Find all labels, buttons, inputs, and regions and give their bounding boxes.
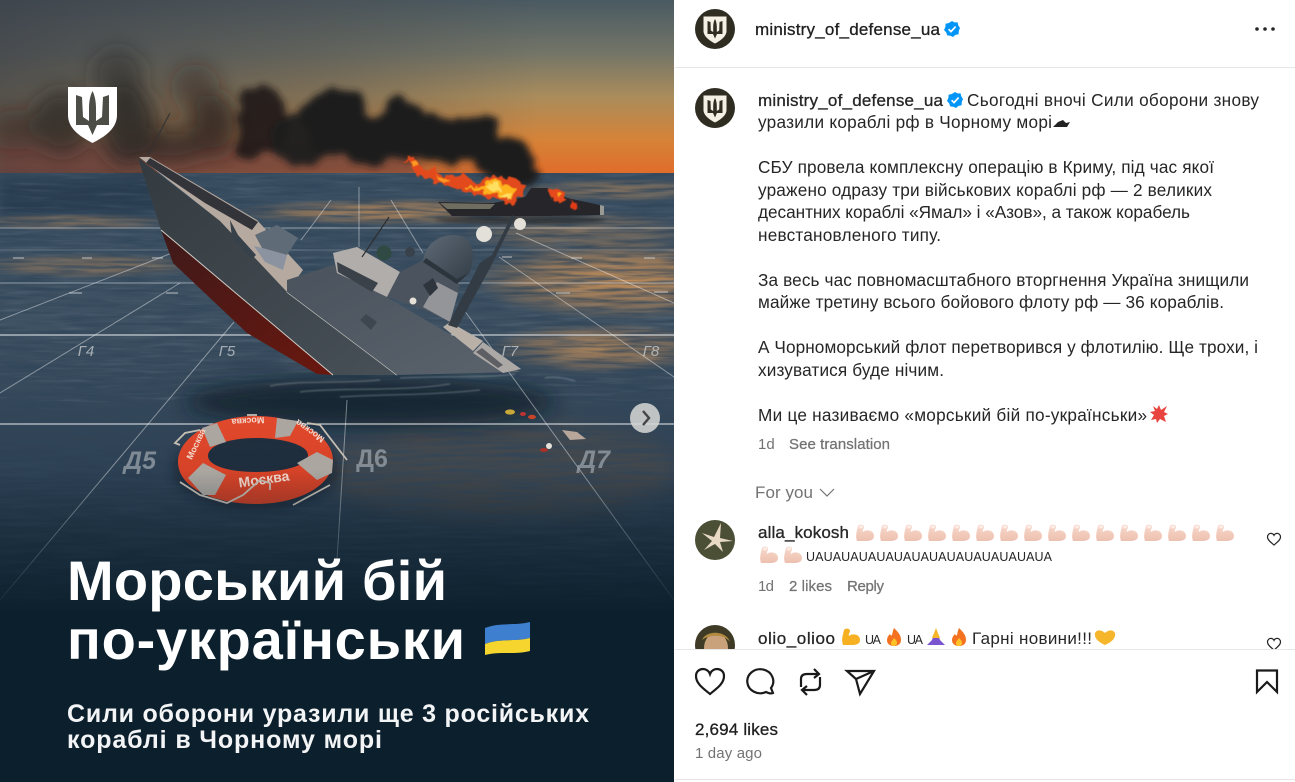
comment: alla_kokosh: UAUAUAUAUAUAUAUAUAUAUAUAUAUA xyxy=(806,550,1053,564)
lifebuoy: Москва xyxy=(185,426,208,461)
avatar xyxy=(695,9,735,49)
comment: olio_olioo: Гарні новини!!! xyxy=(972,629,1092,648)
aft deck xyxy=(443,322,483,351)
lifebuoy: Москва xyxy=(230,415,265,427)
emoji: heart hands xyxy=(1095,630,1115,645)
emoji: praying hands xyxy=(927,628,945,645)
icon: Ukrainian flag xyxy=(485,622,530,655)
grid labels: Г5 xyxy=(219,343,236,360)
caption paragraph 3: За весь час повномасштабного вторгнення Україна знищили xyxy=(758,270,1249,290)
caption username: ministry_of_defense_ua xyxy=(758,91,944,110)
logo: trident shield xyxy=(68,87,117,143)
lifebuoy xyxy=(172,415,347,510)
heading: по-українськи xyxy=(67,608,465,671)
comments list xyxy=(695,520,1282,649)
foredeck xyxy=(139,157,303,292)
white radomes xyxy=(476,226,492,242)
caption meta: 1d xyxy=(758,436,775,453)
caption badge xyxy=(947,92,963,108)
avatar: flower xyxy=(695,520,735,560)
green sensor xyxy=(376,246,392,260)
bottom fade xyxy=(0,476,674,610)
radar dome xyxy=(423,235,473,284)
icon: heart xyxy=(696,669,724,694)
large grid labels: Д7 xyxy=(576,446,611,474)
icon: like comment xyxy=(1268,533,1280,545)
sea xyxy=(0,172,674,610)
comment: olio_olioo: UA xyxy=(865,633,882,647)
caption paragraph 3 xyxy=(758,270,1249,312)
red underside xyxy=(161,230,333,375)
grid labels: Г7 xyxy=(502,343,519,360)
large grid labels: Д5 xyxy=(122,447,157,475)
post header xyxy=(695,9,1275,49)
likes count: 2,694 likes xyxy=(695,720,778,739)
large grid labels xyxy=(122,449,611,474)
grid lines on water xyxy=(0,187,674,600)
icon: collision xyxy=(1150,405,1168,423)
grey hull xyxy=(138,158,397,375)
caption avatar xyxy=(695,88,735,128)
comment meta: 1d xyxy=(758,578,774,595)
forward gun turret xyxy=(255,225,298,255)
caption paragraph 4 xyxy=(758,337,1258,380)
icon: share xyxy=(847,671,874,694)
red ring xyxy=(178,416,333,504)
grid labels xyxy=(78,346,660,356)
post time: 1 day ago xyxy=(695,745,762,762)
carousel next button xyxy=(630,403,660,433)
photo panel: sinking warship xyxy=(0,0,674,782)
for you sort: For you xyxy=(755,483,813,502)
heading xyxy=(67,549,465,671)
caption paragraph 2: уражено одразу три військових кораблі рф — 2 великих xyxy=(758,180,1212,200)
username: ministry_of_defense_ua xyxy=(755,20,941,39)
emoji row xyxy=(760,525,1234,563)
comment: olio_olioo: UA xyxy=(907,633,924,647)
burning ship xyxy=(435,188,605,224)
large grid labels: Д6 xyxy=(356,445,388,473)
action bar xyxy=(696,669,1277,695)
icon: comment xyxy=(747,669,773,693)
bridge xyxy=(333,247,400,297)
emoji: fire xyxy=(887,628,901,646)
lifebuoy: Москва xyxy=(293,417,326,445)
faint smoke drift xyxy=(0,49,239,165)
avatar: portrait xyxy=(695,625,735,665)
caption paragraph 3: майже третину всього бойового флоту рф — 36 кораблів. xyxy=(758,292,1224,312)
comment: alla_kokosh: alla_kokosh xyxy=(758,523,849,542)
icon: repost xyxy=(801,669,820,695)
caption paragraph 1: уразили кораблі рф в Чорному морі xyxy=(758,112,1052,132)
caption xyxy=(695,88,1259,453)
bow antenna xyxy=(148,113,170,155)
comment meta: 2 likes xyxy=(789,578,832,595)
caption meta: See translation xyxy=(789,436,890,453)
emoji: fire xyxy=(952,628,966,646)
mast xyxy=(448,215,515,328)
icon: like comment xyxy=(1268,638,1280,650)
subheading: Сили оборони уразили ще 3 російських xyxy=(67,700,589,728)
comment: olio_olioo: olio_olioo xyxy=(758,629,835,648)
comment: olio_olioo xyxy=(695,625,1280,665)
caption paragraph 2: десантних кораблі «Ямал» і «Азов», а також корабель xyxy=(758,202,1190,222)
comment meta: Reply xyxy=(847,578,884,595)
grid labels: Г4 xyxy=(78,343,94,360)
caption paragraph 2: невстановленого типу. xyxy=(758,225,941,245)
lettering: Москва xyxy=(237,468,290,490)
comment meta xyxy=(758,578,884,595)
superstructure xyxy=(287,265,520,375)
smoke plume xyxy=(234,86,543,185)
caption paragraph 1 xyxy=(758,90,1259,132)
caption paragraph 4: хизуватися буде нічим. xyxy=(758,360,944,380)
caption paragraph 4: А Чорноморський флот перетворився у флотилію. Ще трохи, і xyxy=(758,337,1258,357)
caption paragraph 1: Сьогодні вночі Сили оборони знову xyxy=(967,90,1259,110)
more options xyxy=(1255,27,1275,31)
subheading xyxy=(67,700,589,754)
caption paragraph 5: Ми це називаємо «морський бій по-українськи» xyxy=(758,405,1147,425)
foam at waterline xyxy=(270,374,575,397)
verified badge xyxy=(944,21,960,37)
subheading: кораблі в Чорному морі xyxy=(67,726,382,754)
light block xyxy=(423,282,458,322)
stern xyxy=(473,342,521,373)
flames xyxy=(405,156,578,208)
emoji: flexed biceps xyxy=(842,629,860,645)
grey bands xyxy=(202,423,226,447)
floating debris xyxy=(505,409,586,452)
icon: bookmark xyxy=(1257,670,1277,692)
caption paragraph 2 xyxy=(758,157,1214,245)
grid markers, far rows xyxy=(13,257,668,293)
sinking warship xyxy=(138,113,526,375)
comment: alla_kokosh xyxy=(695,520,1280,595)
grid labels: Г8 xyxy=(643,343,660,360)
sunset sky xyxy=(0,0,674,176)
heading: Морський бій xyxy=(67,549,447,612)
caption paragraph 2: СБУ провела комплексну операцію в Криму, під час якої xyxy=(758,157,1214,177)
rope xyxy=(175,415,347,505)
